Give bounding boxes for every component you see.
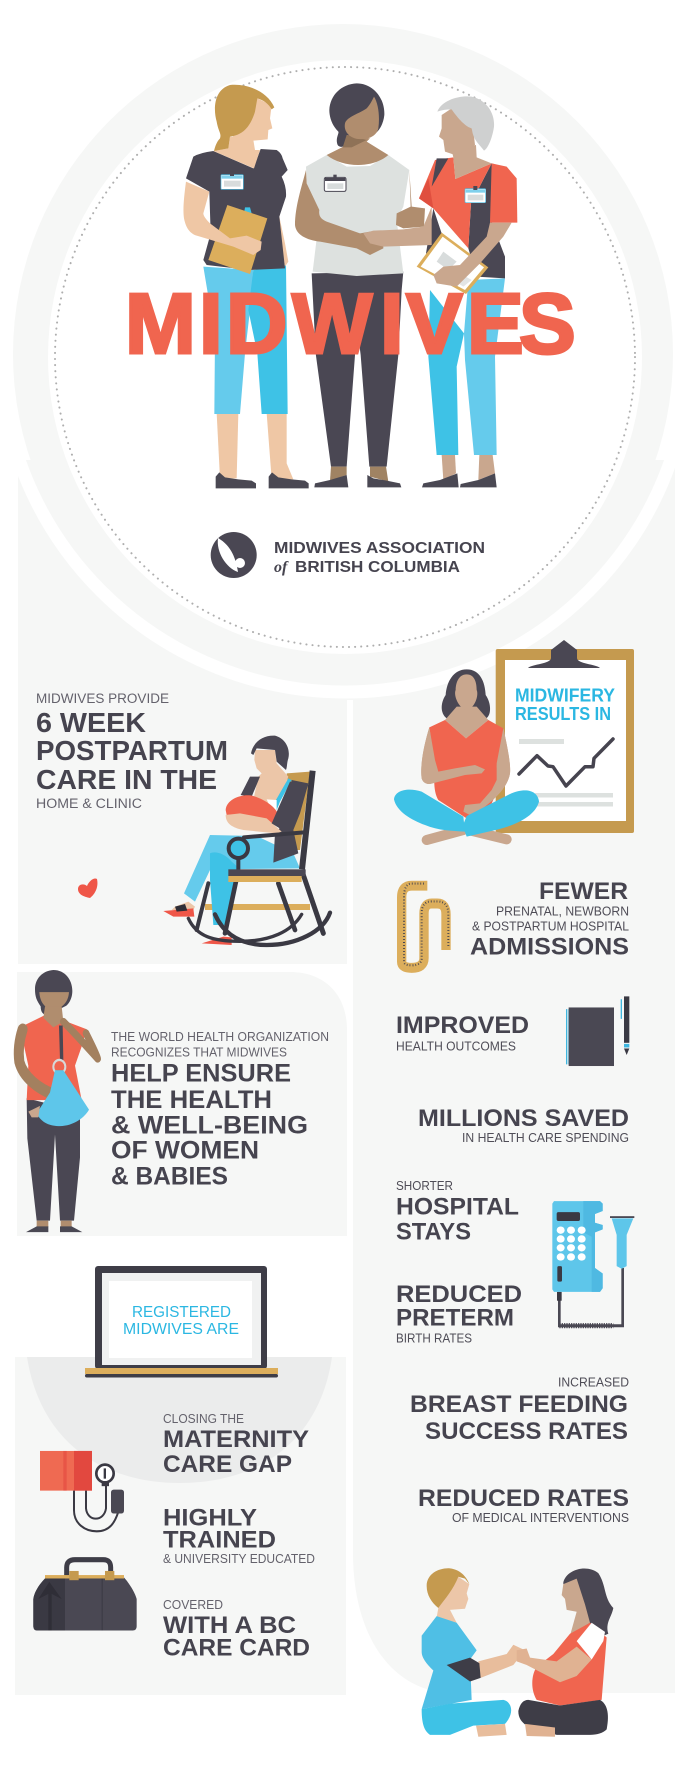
- heading: midwifery results in: MIDWIFERY: [515, 685, 616, 706]
- text block: increased breast feeding: BREAST FEEDING: [410, 1391, 628, 1418]
- text block: reduced preterm birth rates: BIRTH RATES: [396, 1331, 472, 1345]
- text block: World Health Organization: THE WORLD HEALTH ORGANIZATION: [111, 1029, 329, 1044]
- text block: reduced rates of medical interventions: [418, 1485, 629, 1525]
- text block: registered midwives list: & UNIVERSITY EDUCATED: [163, 1552, 315, 1566]
- illustration: mother nursing in rocking chair: [163, 736, 330, 945]
- text block: fewer admissions: FEWER: [539, 878, 628, 905]
- text block: millions saved: MILLIONS SAVED: [418, 1105, 629, 1132]
- heading: midwifery results in: RESULTS IN: [515, 703, 611, 724]
- text block: postpartum care: MIDWIVES PROVIDE: [36, 691, 169, 706]
- text block: shorter hospital stays: STAYS: [396, 1218, 471, 1245]
- icon: tape measure: [402, 884, 448, 968]
- illustration: woman with baby sling: [19, 970, 98, 1232]
- text block: millions saved: [418, 1105, 629, 1145]
- text block: postpartum care: CARE IN THE: [36, 764, 217, 795]
- text block: reduced rates of medical interventions: REDUCED RATES: [418, 1485, 629, 1512]
- text block: increased breast feeding: SUCCESS RATES: [425, 1418, 628, 1445]
- text block: World Health Organization: OF WOMEN: [111, 1137, 259, 1165]
- text block: postpartum care: [36, 691, 228, 811]
- text block: registered midwives list: MATERNITY: [163, 1426, 309, 1453]
- text block: registered midwives list: CLOSING THE: [163, 1412, 244, 1426]
- figure: pregnant woman: [517, 1569, 613, 1737]
- chair frame: [188, 771, 330, 945]
- text block: increased breast feeding: INCREASED: [558, 1375, 629, 1389]
- figure: grey-haired midwife: [363, 96, 517, 487]
- text block: World Health Organization: HELP ENSURE: [111, 1060, 291, 1088]
- text block: registered midwives list: CARE CARD: [163, 1635, 310, 1662]
- text block: reduced preterm birth rates: PRETERM: [396, 1305, 514, 1332]
- text block: postpartum care: POSTPARTUM: [36, 735, 228, 766]
- text block: registered midwives list: CARE GAP: [163, 1451, 292, 1478]
- text block: registered midwives list: COVERED: [163, 1598, 223, 1612]
- text block: reduced preterm birth rates: REDUCED: [396, 1281, 522, 1308]
- icon: medical bag: [33, 1560, 137, 1630]
- text block: World Health Organization: & BABIES: [111, 1162, 228, 1190]
- logo: Midwives Association of British Columbia: BRITISH COLUMBIA: [295, 559, 460, 576]
- illustration: three midwives: [183, 83, 517, 488]
- text block: fewer admissions: [470, 878, 629, 961]
- icon: logo mark: [211, 532, 257, 578]
- text block: World Health Organization: THE HEALTH: [111, 1086, 272, 1114]
- illustration: pregnant woman sitting: [394, 669, 539, 840]
- text block: shorter hospital stays: [396, 1179, 519, 1245]
- icon: blood pressure cuff: [40, 1451, 124, 1531]
- figure: blonde midwife: [183, 85, 309, 488]
- figure: midwife: [422, 1568, 525, 1737]
- text block: registered midwives list: HIGHLY: [163, 1504, 257, 1532]
- title: MIDWIVES: MIDWIVES: [125, 277, 576, 372]
- text block: fewer admissions: PRENATAL, NEWBORN: [496, 904, 629, 918]
- icon: heart: [78, 878, 97, 898]
- heading: registered midwives are: REGISTERED: [132, 1304, 231, 1321]
- heading: midwifery results in: [515, 685, 616, 724]
- heading: registered midwives are: MIDWIVES ARE: [123, 1321, 239, 1338]
- illustration: clipboard with results chart: [496, 640, 634, 833]
- text block: World Health Organization: & WELL-BEING: [111, 1111, 308, 1139]
- text block: improved health outcomes: [396, 1012, 529, 1053]
- text block: postpartum care: HOME & CLINIC: [36, 796, 142, 811]
- icon: fetal doppler device: [552, 1201, 634, 1326]
- heading: registered midwives are: [123, 1304, 239, 1338]
- logo: Midwives Association of British Columbia: MIDWIVES ASSOCIATION: [274, 540, 485, 557]
- icon: notebook and pen: [566, 996, 629, 1066]
- illustration: midwife and pregnant woman holding hands: [422, 1568, 613, 1737]
- text block: registered midwives list: WITH A BC: [163, 1612, 296, 1639]
- illustration: laptop with heading: [85, 1266, 278, 1378]
- text block: shorter hospital stays: HOSPITAL: [396, 1194, 519, 1221]
- logo: Midwives Association of British Columbia: of: [274, 559, 289, 576]
- text block: postpartum care: 6 WEEK: [36, 707, 146, 738]
- text block: World Health Organization: RECOGNIZES THAT MIDWIVES: [111, 1044, 287, 1060]
- text block: registered midwives list: [163, 1412, 315, 1662]
- icon: clip: [528, 640, 600, 668]
- text block: increased breast feeding: [410, 1375, 629, 1445]
- text block: millions saved: IN HEALTH CARE SPENDING: [462, 1131, 629, 1145]
- chart: trend line: [519, 739, 613, 786]
- text block: registered midwives list: TRAINED: [163, 1527, 276, 1554]
- text block: reduced preterm birth rates: [396, 1281, 522, 1345]
- figure: central midwife: [295, 83, 425, 487]
- text block: shorter hospital stays: SHORTER: [396, 1179, 453, 1193]
- logo: Midwives Association of British Columbia: [211, 532, 485, 578]
- text block: World Health Organization: [111, 1029, 329, 1190]
- text block: fewer admissions: & POSTPARTUM HOSPITAL: [472, 920, 629, 934]
- text block: improved health outcomes: IMPROVED: [396, 1012, 529, 1039]
- text block: fewer admissions: ADMISSIONS: [470, 934, 629, 961]
- text block: reduced rates of medical interventions: OF MEDICAL INTERVENTIONS: [452, 1511, 629, 1525]
- text block: improved health outcomes: HEALTH OUTCOMES: [396, 1039, 516, 1053]
